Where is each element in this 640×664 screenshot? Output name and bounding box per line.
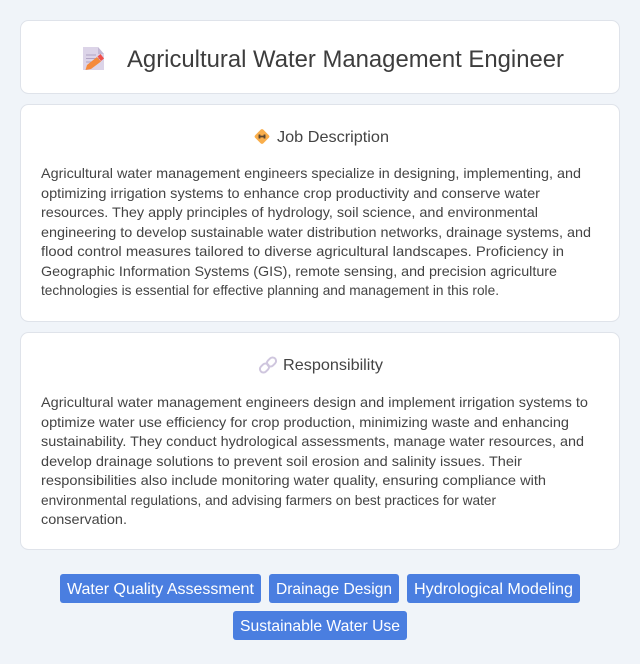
panel: responsibility	[20, 332, 620, 550]
text block: job description: technologies is essential for effective planning and management in this role.	[41, 282, 499, 298]
text block: responsibility: develop drainage solutions to prevent soil erosion and salinity issues. Their	[41, 453, 522, 469]
panel: title header	[20, 20, 620, 94]
tag: water quality assessment	[60, 574, 261, 603]
text block: responsibility: responsibilities also include monitoring water quality, ensuring compliance with	[41, 472, 546, 488]
text block: responsibility: sustainability. They conduct hydrological assessments, manage water resources, and	[41, 433, 584, 449]
tag: hydrological modeling	[407, 574, 580, 603]
heading: responsibility: Responsibility	[283, 357, 383, 374]
text block: responsibility: optimize water use efficiency for crop production, minimizing waste and enhancing	[41, 414, 569, 430]
text block: job description: resources. They apply principles of hydrology, soil science, and environmental	[41, 204, 538, 220]
heading: job description: Job Description	[277, 129, 389, 146]
text block: responsibility: conservation.	[41, 511, 127, 527]
text block: job description: engineering to develop sustainable water distribution networks, drainage systems, and	[41, 224, 591, 240]
text block: job description: Agricultural water management engineers specialize in designing, implementing, and	[41, 165, 581, 181]
icon: chain link	[258, 356, 278, 374]
tag: drainage design	[269, 574, 399, 603]
text block: job description: Geographic Information Systems (GIS), remote sensing, and precision agriculture	[41, 263, 557, 279]
text block: job description: optimizing irrigation systems to enhance crop productivity and conserve water	[41, 185, 540, 201]
text block: job description: flood control measures tailored to diverse agricultural landscapes. Proficiency in	[41, 243, 564, 259]
tag: drainage design: Drainage Design	[276, 581, 392, 598]
tag: sustainable water use	[233, 611, 407, 640]
tag: water quality assessment: Water Quality Assessment	[67, 581, 255, 598]
text block: responsibility: environmental regulations, and advising farmers on best practices for water	[41, 492, 496, 508]
panel: job description	[20, 104, 620, 322]
icon: document with pencil	[83, 47, 104, 70]
tag: sustainable water use: Sustainable Water Use	[240, 618, 400, 635]
text block: responsibility: Agricultural water management engineers design and implement irrigation systems to	[41, 394, 588, 410]
text block: job description	[41, 165, 591, 298]
icon: orange diamond sign	[254, 128, 270, 145]
tag: hydrological modeling: Hydrological Modeling	[414, 581, 573, 598]
text block: responsibility	[41, 394, 588, 527]
title: Agricultural Water Management Engineer	[127, 46, 564, 73]
